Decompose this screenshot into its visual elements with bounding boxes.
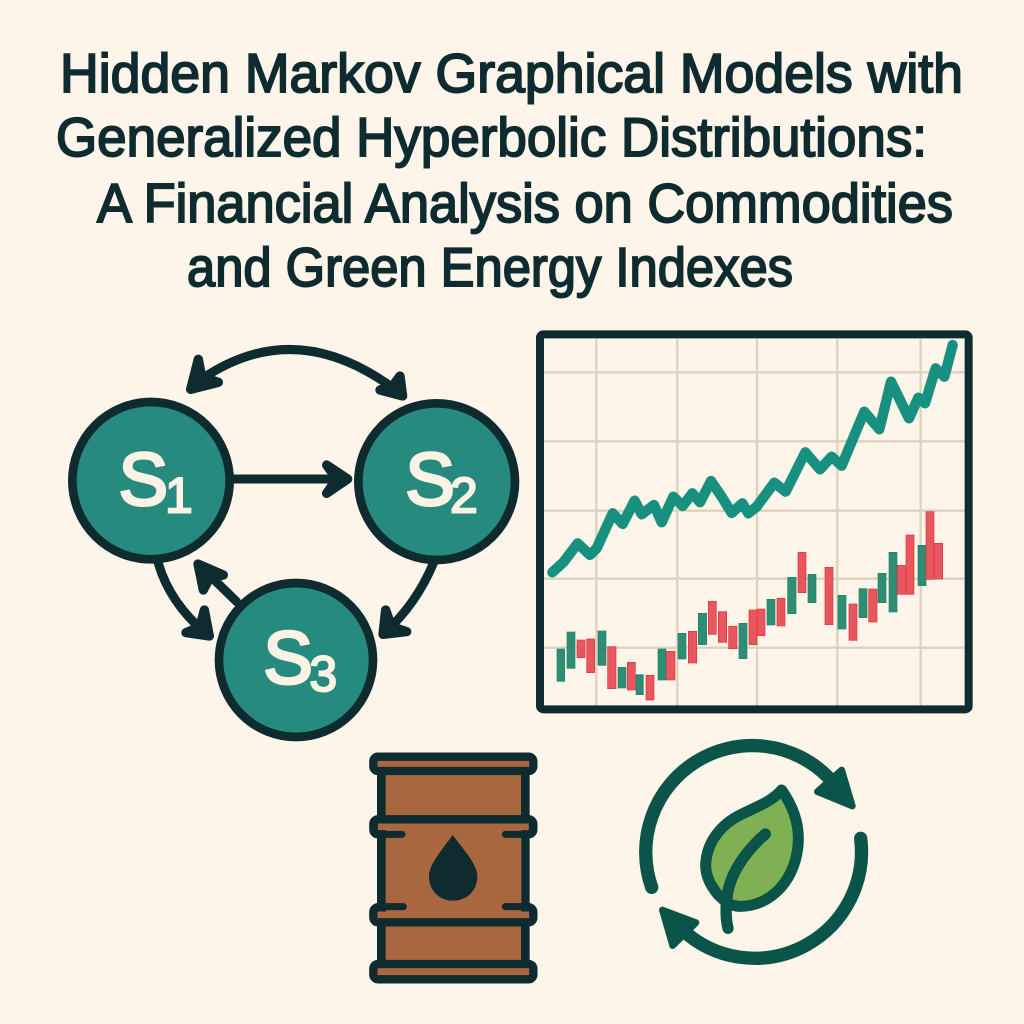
icon: leaf bbox=[706, 790, 798, 928]
state node S3 bbox=[219, 583, 373, 737]
chart frame bbox=[540, 334, 969, 709]
title line 3: A Financial Analysis on Commodities bbox=[97, 172, 953, 234]
chart background and frame bbox=[540, 334, 969, 709]
icon: oil barrel bbox=[373, 757, 533, 979]
financial chart panel bbox=[540, 334, 969, 709]
arrow: S1 to S3 bbox=[158, 563, 209, 636]
title line 4: and Green Energy Indexes bbox=[187, 236, 793, 298]
state node S2 bbox=[358, 403, 515, 560]
arrow: S3 to S1 bbox=[198, 564, 237, 602]
arrow: S1 to S2 bbox=[233, 465, 348, 493]
arrow: top cycle arc bbox=[646, 746, 852, 887]
title line 1: Hidden Markov Graphical Models with bbox=[60, 42, 963, 104]
title bbox=[56, 42, 963, 298]
state node S3: S bbox=[263, 616, 313, 699]
green energy index line bbox=[552, 345, 953, 572]
candlestick series bbox=[557, 512, 943, 700]
icon: renewable leaf cycle bbox=[646, 746, 861, 958]
arrow: bottom cycle arc bbox=[662, 838, 861, 958]
state node S2: 2 bbox=[450, 468, 478, 524]
state node S2: S bbox=[405, 438, 455, 521]
arrow: S1 and S2 double-headed arc bbox=[191, 349, 403, 396]
state node S1 bbox=[72, 402, 230, 559]
state node S3: 3 bbox=[309, 646, 337, 702]
state node S1: S bbox=[119, 438, 168, 521]
title line 2: Generalized Hyperbolic Distributions: bbox=[56, 106, 927, 168]
icon: oil drop bbox=[429, 835, 477, 901]
arrow: S2 to S3 bbox=[383, 563, 433, 634]
state node S1: 1 bbox=[165, 468, 193, 524]
hidden Markov state diagram bbox=[72, 349, 515, 737]
